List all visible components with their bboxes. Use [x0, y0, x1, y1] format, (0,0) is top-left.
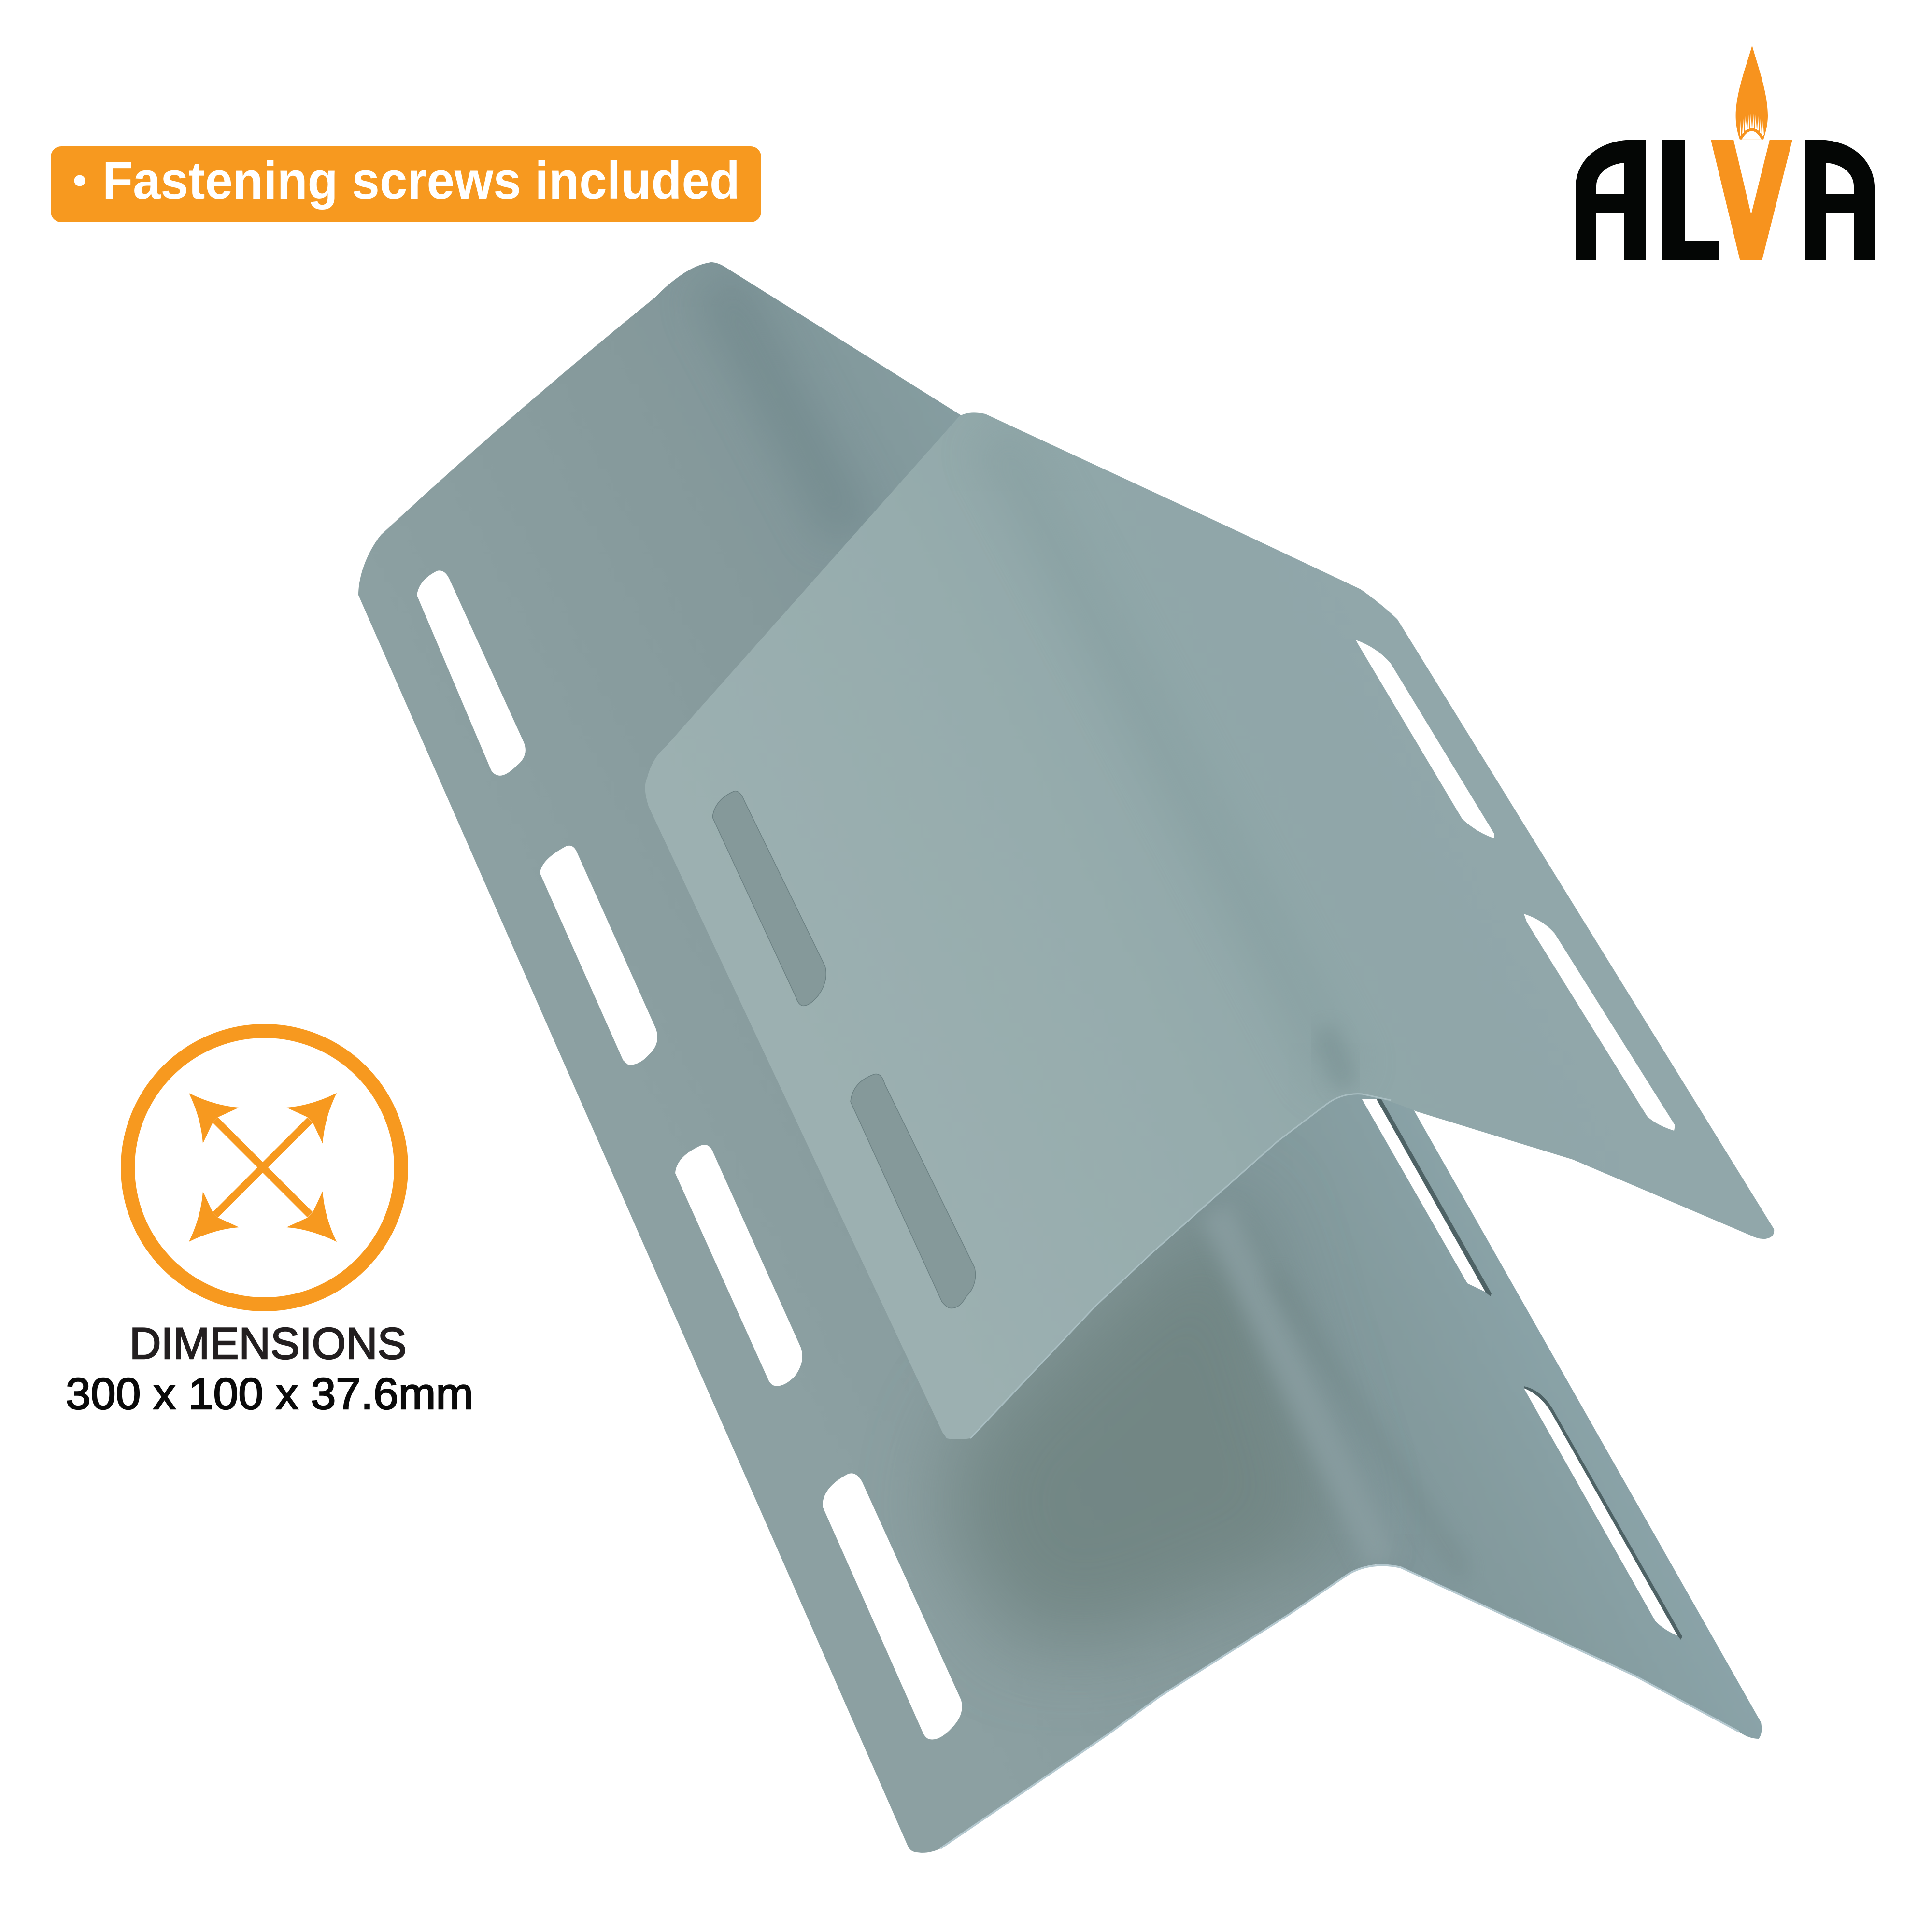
- dimensions text: 300 x 100 x 37.6mm: [66, 1369, 473, 1419]
- dimensions text: DIMENSIONS: [129, 1319, 407, 1368]
- logo: ALVA with flame: [1576, 45, 1875, 260]
- product: metal plate: [358, 262, 1774, 1853]
- icon: dimensions circle with arrows: [128, 1031, 401, 1304]
- callout: fastening screws included: Fastening screws included: [102, 151, 740, 210]
- back plate: [358, 262, 1762, 1853]
- dimensions text: [66, 1319, 473, 1419]
- front plate: [645, 412, 1774, 1439]
- front plate slots: [712, 640, 1675, 1308]
- back plate slots: [417, 570, 1682, 1740]
